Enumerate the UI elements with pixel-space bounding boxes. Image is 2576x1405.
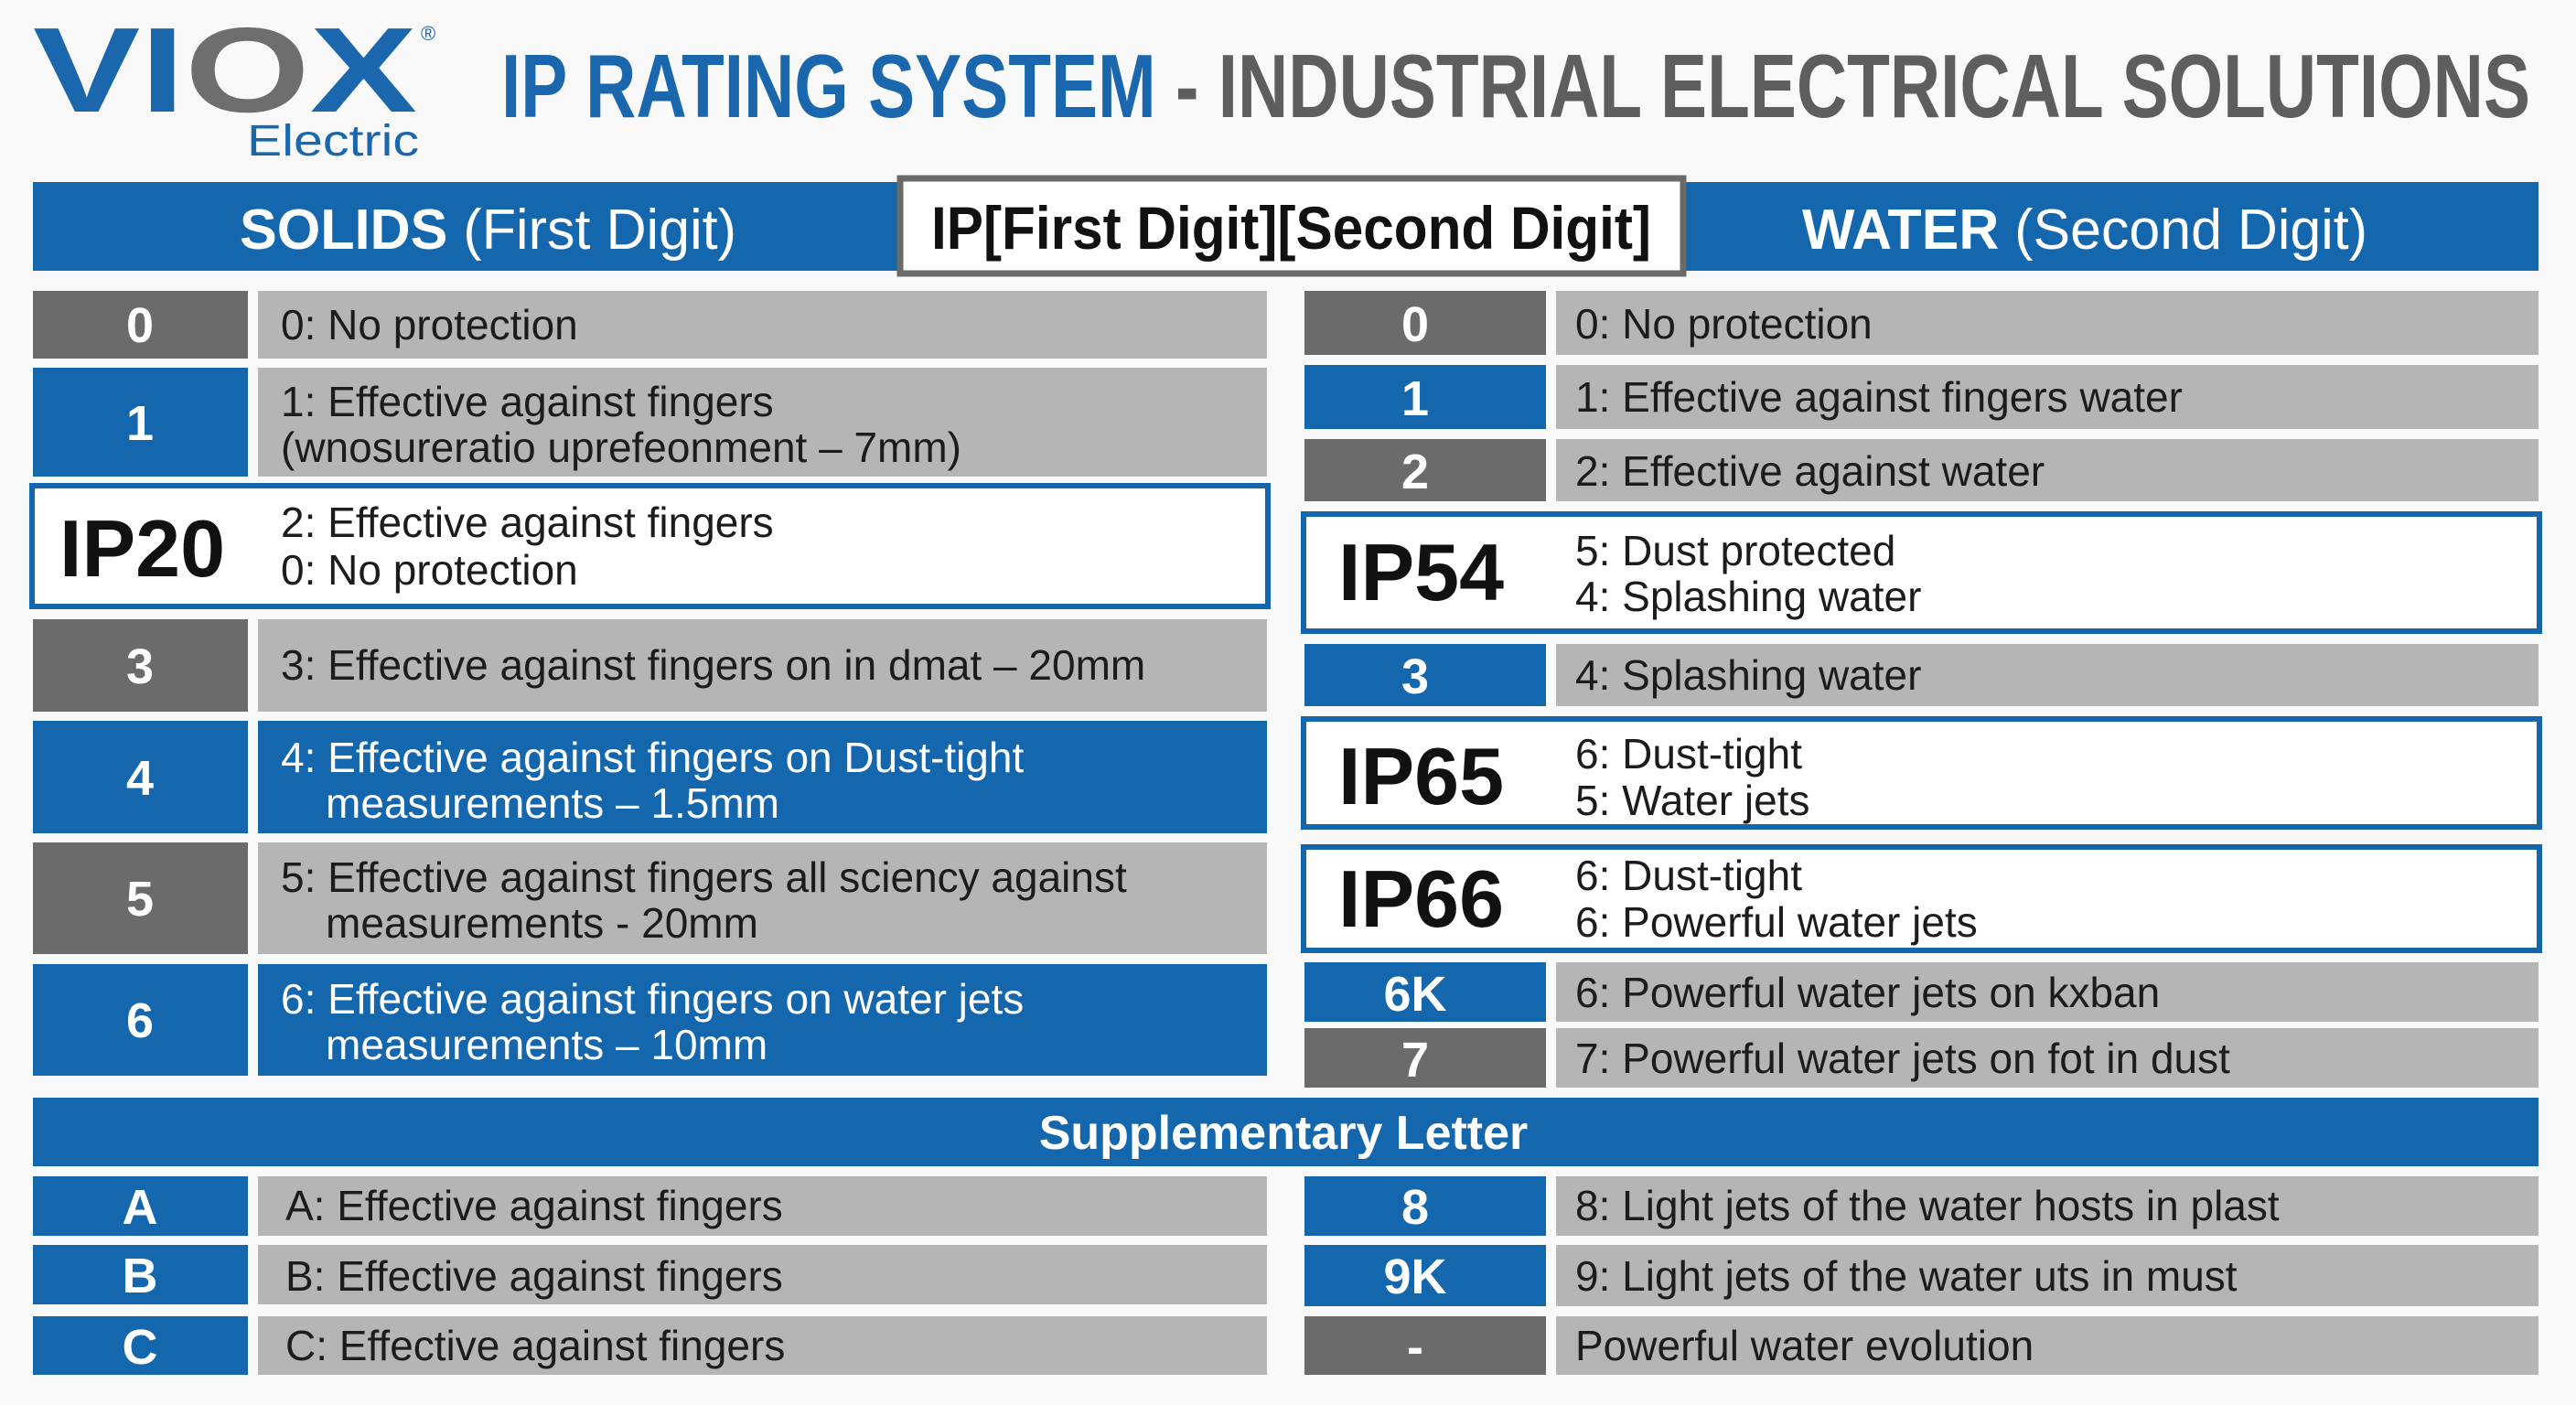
panel: water supplementary [1304,1176,2538,1375]
row 6K [1304,962,2538,1022]
row 8: 8 [1401,1180,1429,1235]
highlight: IP65: 5: Water jets [1575,777,1809,824]
row A: A [123,1180,157,1235]
row C: C [123,1320,157,1375]
center formula box: IP[First Digit][Second Digit] [931,194,1651,262]
highlight: IP66 [1304,847,2539,950]
highlight: IP20: 2: Effective against fingers [281,499,774,546]
row 7 [1304,1028,2538,1088]
row dash [1304,1316,2538,1375]
row B: B [123,1249,157,1303]
row 0: 0 [1401,297,1429,352]
highlight: IP20 [32,486,1268,606]
row 4: 4: Effective against fingers on Dust-tight [281,734,1024,781]
highlight: IP54: 4: Splashing water [1575,573,1921,620]
row 6: 6: Effective against fingers on water jets [281,975,1024,1023]
row 2: 2 [1401,445,1429,499]
row 0: 0: No protection [281,301,578,349]
row 6K: 6: Powerful water jets on kxban [1575,969,2160,1016]
highlight: IP54 [1304,514,2539,631]
header band [33,182,2538,271]
row 8 [1304,1176,2538,1236]
row 5: measurements - 20mm [326,899,758,947]
row 3: 4: Splashing water [1575,651,1921,699]
panel: solids rows [32,291,1268,1076]
highlight: IP66: 6: Dust-tight [1575,852,1802,899]
row A [33,1176,1267,1236]
row 1 [33,368,1267,477]
row 2: 2: Effective against water [1575,447,2045,495]
row 4: 4 [126,751,154,806]
row 0 [1304,291,2538,355]
row dash: Powerful water evolution [1575,1322,2034,1369]
row 1: 1 [1401,371,1429,426]
highlight: IP20: 0: No protection [281,546,578,594]
heading: water: WATER (Second Digit) [1802,198,2367,262]
row B: B: Effective against fingers [285,1252,783,1300]
row 3 [1304,644,2538,706]
row C [33,1316,1267,1375]
row 1: 1 [126,396,154,451]
highlight: IP65 [1304,719,2539,827]
highlight: IP66: 6: Powerful water jets [1575,898,1978,946]
row 5: 5 [126,872,154,927]
row C: C: Effective against fingers [285,1322,785,1369]
logo: VIOX Electric: ® [421,22,435,45]
row 5: 5: Effective against fingers all sciency against [281,853,1127,901]
panel: supplementary letters [33,1176,1267,1375]
logo: VIOX Electric: VI O X [33,3,417,137]
row 0: 0 [126,298,154,353]
row 1 [1304,365,2538,429]
row 7: 7: Powerful water jets on fot in dust [1575,1035,2230,1082]
row 6 [33,964,1267,1076]
logo: VIOX Electric: Electric [247,117,419,166]
row 6K: 6K [1383,967,1447,1022]
row A: A: Effective against fingers [285,1182,783,1229]
row 9K [1304,1245,2538,1306]
highlight: IP66: IP66 [1338,853,1504,944]
row 3: 3 [1401,649,1429,704]
panel: water rows [1304,291,2539,1088]
highlight: IP54: 5: Dust protected [1575,527,1895,574]
highlight: IP65: 6: Dust-tight [1575,730,1802,778]
center formula box [900,178,1683,273]
row 6: measurements – 10mm [326,1021,767,1068]
row 6: 6 [126,993,154,1048]
supplementary letter bar [33,1098,2538,1166]
row 4: measurements – 1.5mm [326,779,779,827]
highlight: IP65: IP65 [1338,731,1504,821]
row 0 [33,291,1267,359]
row 9K: 9K [1383,1249,1447,1304]
row 7: 7 [1401,1033,1429,1088]
row 2 [1304,439,2538,501]
row 3 [33,619,1267,712]
row dash: - [1407,1320,1423,1375]
row 4 [33,721,1267,833]
row 8: 8: Light jets of the water hosts in plast [1575,1182,2280,1229]
row 0: 0: No protection [1575,300,1873,348]
row 9K: 9: Light jets of the water uts in must [1575,1252,2238,1300]
highlight: IP54: IP54 [1338,527,1504,617]
heading: solids: SOLIDS (First Digit) [240,198,736,262]
supplementary letter bar: Supplementary Letter [1039,1107,1528,1160]
highlight: IP20: IP20 [59,503,225,594]
row 3: 3 [126,639,154,694]
row 1: 1: Effective against fingers [281,378,774,425]
row 3: 3: Effective against fingers on in dmat – 20mm [281,641,1145,689]
row 5 [33,842,1267,954]
row 1: 1: Effective against fingers water [1575,373,2183,421]
row B [33,1245,1267,1304]
row 1: (wnosureratio uprefeonment – 7mm) [281,424,961,471]
